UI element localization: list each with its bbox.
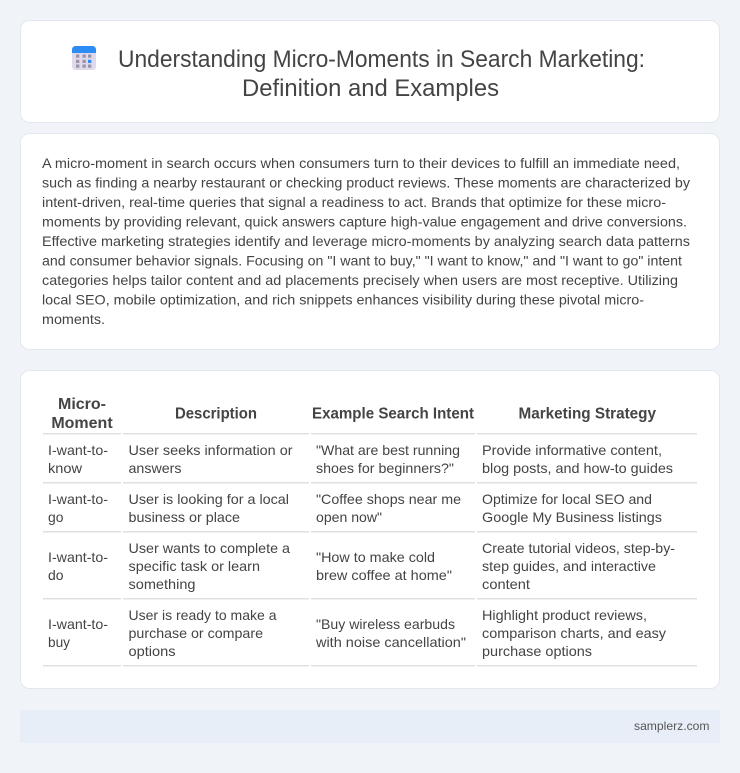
table row: I-want-to-buy: with noise cancellation": [315, 634, 466, 650]
table row: I-want-to-know: User seeks information or: [128, 442, 293, 458]
panel: introduction: [20, 134, 720, 350]
table row: I-want-to-buy: User is ready to make a: [128, 607, 277, 623]
table row: I-want-to-do: "How to make cold: [316, 549, 435, 565]
text block: micro-moment definition: and consumer behavior signals. Focusing on "I want to buy," "I want to know," and "I want to go" intent: [42, 252, 682, 268]
text block: micro-moment definition: intent-driven, real-time queries that signal a readiness to act. Brands that optimize for these micro-: [42, 194, 666, 210]
table row: I-want-to-go: "Coffee shops near me: [316, 491, 461, 507]
table header row: Description: [175, 406, 257, 422]
text block: micro-moment definition: local SEO, mobile optimization, and rich snippets enhances visibility during these pivotal micro-: [42, 292, 644, 308]
table row: I-want-to-know: Provide informative content,: [482, 442, 662, 458]
text block: micro-moment definition: [42, 155, 690, 327]
table row: I-want-to-go: Google My Business listings: [482, 509, 662, 525]
text block: micro-moment definition: moments.: [42, 311, 105, 327]
table row: I-want-to-go: I-want-to-: [48, 491, 108, 507]
table row: I-want-to-buy: [48, 607, 666, 659]
text block: micro-moment definition: categories helps tailor content and ad placements precisely when users are most receptive. Utilizing: [42, 272, 678, 288]
table header row: [51, 396, 656, 432]
table row: I-want-to-buy: purchase options: [482, 643, 592, 659]
table row: I-want-to-do: step guides, and interactive: [482, 558, 656, 574]
table row: I-want-to-do: [48, 540, 675, 592]
table row: I-want-to-go: business or place: [128, 509, 240, 525]
table row: I-want-to-know: shoes for beginners?": [316, 460, 454, 476]
table row: I-want-to-know: blog posts, and how-to guides: [482, 460, 673, 476]
text block: micro-moment definition: A micro-moment in search occurs when consumers turn to their devices to fulfill an immediate need,: [42, 155, 680, 171]
text block: micro-moment definition: Effective marketing strategies identify and leverage micro-moments by analyzing search data patterns: [42, 233, 690, 249]
title: [118, 46, 645, 102]
table row: I-want-to-know: "What are best running: [316, 442, 460, 458]
table row: I-want-to-do: something: [128, 576, 196, 592]
title: Definition and Examples: [242, 75, 499, 102]
table row: I-want-to-know: [48, 442, 673, 476]
table row: I-want-to-do: brew coffee at home": [316, 567, 452, 583]
table row: I-want-to-do: specific task or learn: [128, 558, 260, 574]
text block: micro-moment definition: moments by providing relevant, quick answers capture high-value engagement and drive conversions.: [42, 214, 687, 230]
table header row: Example Search Intent: [312, 406, 475, 422]
title: Understanding Micro-Moments in Search Marketing:: [118, 46, 645, 73]
table row: I-want-to-do: I-want-to-: [48, 549, 108, 565]
table row: I-want-to-buy: "Buy wireless earbuds: [316, 616, 455, 632]
table header row: Moment: [51, 415, 113, 432]
table row: I-want-to-go: Optimize for local SEO and: [482, 491, 652, 507]
table row: I-want-to-buy: Highlight product reviews,: [482, 607, 647, 623]
table row: I-want-to-go: [48, 491, 662, 525]
panel: title header: [20, 20, 720, 122]
table row: I-want-to-do: User wants to complete a: [128, 540, 290, 556]
table row: I-want-to-go: open now": [316, 509, 382, 525]
table header row: Marketing Strategy: [518, 406, 656, 422]
table row: I-want-to-know: answers: [128, 460, 182, 476]
table row: I-want-to-buy: options: [128, 643, 176, 659]
icon: calendar: [72, 46, 96, 70]
table header row: Micro-: [58, 396, 106, 413]
table row: I-want-to-do: content: [482, 576, 530, 592]
table row: I-want-to-buy: I-want-to-: [48, 616, 108, 632]
table row: I-want-to-go: go: [48, 509, 64, 525]
table row: I-want-to-buy: buy: [48, 634, 70, 650]
table row: I-want-to-know: I-want-to-: [48, 442, 108, 458]
table row: I-want-to-do: do: [48, 567, 64, 583]
table row: I-want-to-buy: purchase or compare: [128, 625, 263, 641]
table row: I-want-to-know: know: [48, 460, 83, 476]
table row: I-want-to-do: Create tutorial videos, step-by-: [482, 540, 675, 556]
panel: micro-moments table: [20, 370, 720, 688]
footer source text: samplerz.com: [634, 719, 710, 733]
table row: I-want-to-buy: comparison charts, and easy: [482, 625, 666, 641]
table row: I-want-to-go: User is looking for a local: [128, 491, 289, 507]
text block: micro-moment definition: such as finding a nearby restaurant or checking product reviews. These moments are characterized by: [42, 174, 690, 190]
footer bar: [20, 710, 720, 743]
